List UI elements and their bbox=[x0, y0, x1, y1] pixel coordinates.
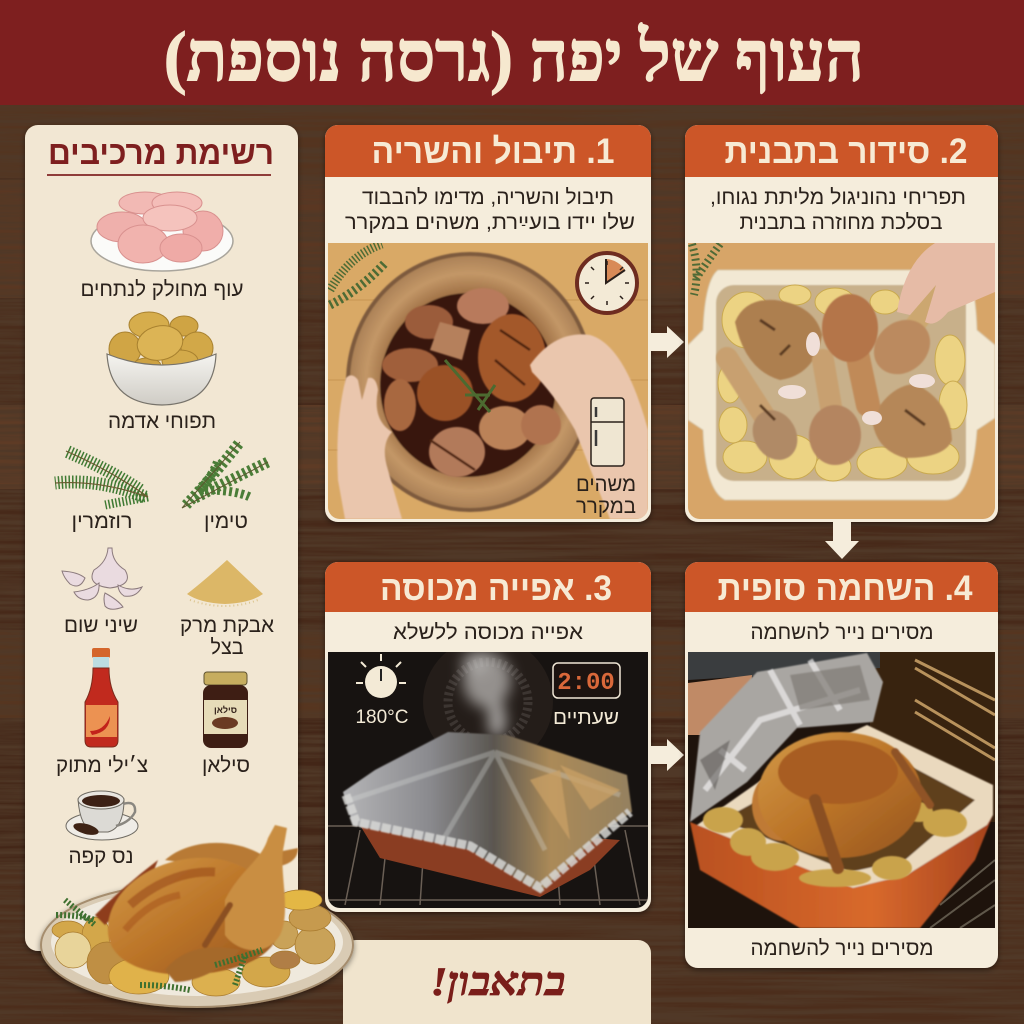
steam bbox=[461, 650, 511, 738]
heading: ingredients: רשימת מרכיבים bbox=[48, 134, 274, 171]
step 1 card bbox=[325, 125, 651, 522]
label: onion soup powder: אבקת מרק bbox=[180, 614, 274, 637]
divider under heading bbox=[47, 174, 271, 176]
garlic bbox=[778, 332, 935, 425]
icon: potato bowl bbox=[107, 312, 216, 405]
step 3 photo: baking covered bbox=[328, 637, 648, 908]
dish bbox=[358, 822, 620, 897]
step 1 photo: marinating chicken bbox=[328, 243, 648, 519]
icon: sweet chili bottle bbox=[85, 648, 118, 747]
temperature icon: 180°C bbox=[355, 707, 409, 728]
temperature icon bbox=[355, 654, 409, 728]
step 2 description: תפריחי נהוניגול מליתת נגוחו, bbox=[710, 186, 966, 209]
label: garlic: שיני שום bbox=[64, 614, 138, 637]
title banner bbox=[0, 0, 1024, 105]
roast chicken bbox=[752, 732, 930, 868]
glass bowl bbox=[348, 254, 592, 510]
platter bird bbox=[95, 825, 298, 982]
step 1 header: 1. תיבול והשריה bbox=[372, 132, 614, 171]
step 4 description: מסירים נייר להשחמה bbox=[750, 621, 934, 644]
rack under dish bbox=[930, 860, 995, 928]
foil being lifted bbox=[690, 653, 883, 822]
fridge caption: במקרר bbox=[576, 495, 636, 518]
chicken pieces bbox=[727, 282, 952, 468]
panel: bon appetit: בתאבון! bbox=[430, 959, 566, 1004]
potato slices bbox=[718, 285, 967, 481]
label: potatoes: תפוחי אדמה bbox=[108, 410, 216, 433]
panel: bon appetit bbox=[343, 940, 651, 1024]
step 2 photo: arranging in pan bbox=[688, 243, 995, 519]
hand bbox=[688, 675, 752, 735]
label: thyme: טימין bbox=[204, 510, 248, 533]
icon: onion soup powder bbox=[187, 560, 263, 606]
arrow: step 1 to 2 bbox=[651, 326, 684, 358]
label: silan: סילאן bbox=[202, 754, 250, 777]
fridge caption bbox=[576, 478, 636, 517]
icon: fridge bbox=[591, 398, 624, 466]
hands bbox=[337, 334, 648, 519]
icon: silan jar: סילאן bbox=[214, 705, 237, 715]
timer icon bbox=[553, 663, 620, 729]
label: sweet chili: צ׳ילי מתוק bbox=[56, 754, 148, 777]
label: onion line two: בצל bbox=[210, 636, 244, 659]
fridge caption: משהים bbox=[576, 473, 636, 496]
timer icon: 2:00 bbox=[557, 670, 615, 697]
arrow: step 3 to 4 bbox=[651, 739, 684, 771]
icon: coffee cup bbox=[66, 791, 138, 840]
icon: rosemary bbox=[55, 451, 148, 505]
panel: ingredients bbox=[25, 125, 298, 951]
step 1 description: תיבול והשריה, מדימו להבבוד bbox=[362, 186, 614, 209]
step 2 description bbox=[710, 186, 966, 234]
herbs bbox=[330, 244, 386, 305]
step 3 description: אפייה מכוסה ללשלא bbox=[393, 621, 583, 644]
dish bbox=[690, 725, 993, 928]
step 1 description: שלו יידו בועײַרת, משהים במקרר bbox=[345, 211, 635, 234]
platter herbs bbox=[56, 900, 262, 990]
step 2 header bbox=[685, 125, 998, 177]
label: chicken: עוף מחולק לנתחים bbox=[80, 278, 244, 301]
icon: garlic bbox=[62, 548, 142, 609]
icon: thyme bbox=[182, 442, 268, 508]
potatoes bbox=[703, 802, 967, 887]
hand bbox=[897, 243, 995, 324]
step 1 header bbox=[325, 125, 651, 177]
step 4 card bbox=[685, 562, 998, 968]
label: coffee: נס קפה bbox=[68, 845, 134, 868]
platter potatoes bbox=[52, 890, 335, 996]
step 4 photo: final browning bbox=[688, 652, 995, 928]
roast chicken platter bbox=[41, 825, 353, 1007]
chicken pieces bbox=[382, 288, 561, 477]
arrow: step 2 to 4 bbox=[825, 522, 859, 559]
step 4 header: 4. השחמה סופית bbox=[718, 569, 973, 608]
label: rosemary: רוזמרין bbox=[72, 510, 132, 533]
icon: clock bbox=[577, 253, 637, 313]
foil cover bbox=[343, 732, 632, 892]
timer icon: שעתיים bbox=[553, 707, 619, 729]
step 4 footer text: מסירים נייר להשחמה bbox=[750, 937, 934, 960]
icon: raw chicken on plate bbox=[91, 192, 233, 271]
step 3 header bbox=[325, 562, 651, 612]
step 2 card bbox=[685, 125, 998, 522]
step 2 description: בסלכת מחוזרה בתבנית bbox=[740, 211, 942, 234]
step 4 header bbox=[685, 562, 998, 612]
title banner: העוף של יפה (גרסה נוספת) bbox=[164, 19, 864, 96]
step 3 card bbox=[325, 562, 651, 912]
step 2 header: 2. סידור בתבנית bbox=[724, 132, 968, 171]
oven rack bbox=[328, 826, 648, 905]
icon: silan jar bbox=[203, 672, 248, 748]
step 1 description bbox=[345, 186, 635, 234]
step 3 header: 3. אפייה מכוסה bbox=[380, 569, 612, 608]
baking dish bbox=[688, 270, 995, 500]
